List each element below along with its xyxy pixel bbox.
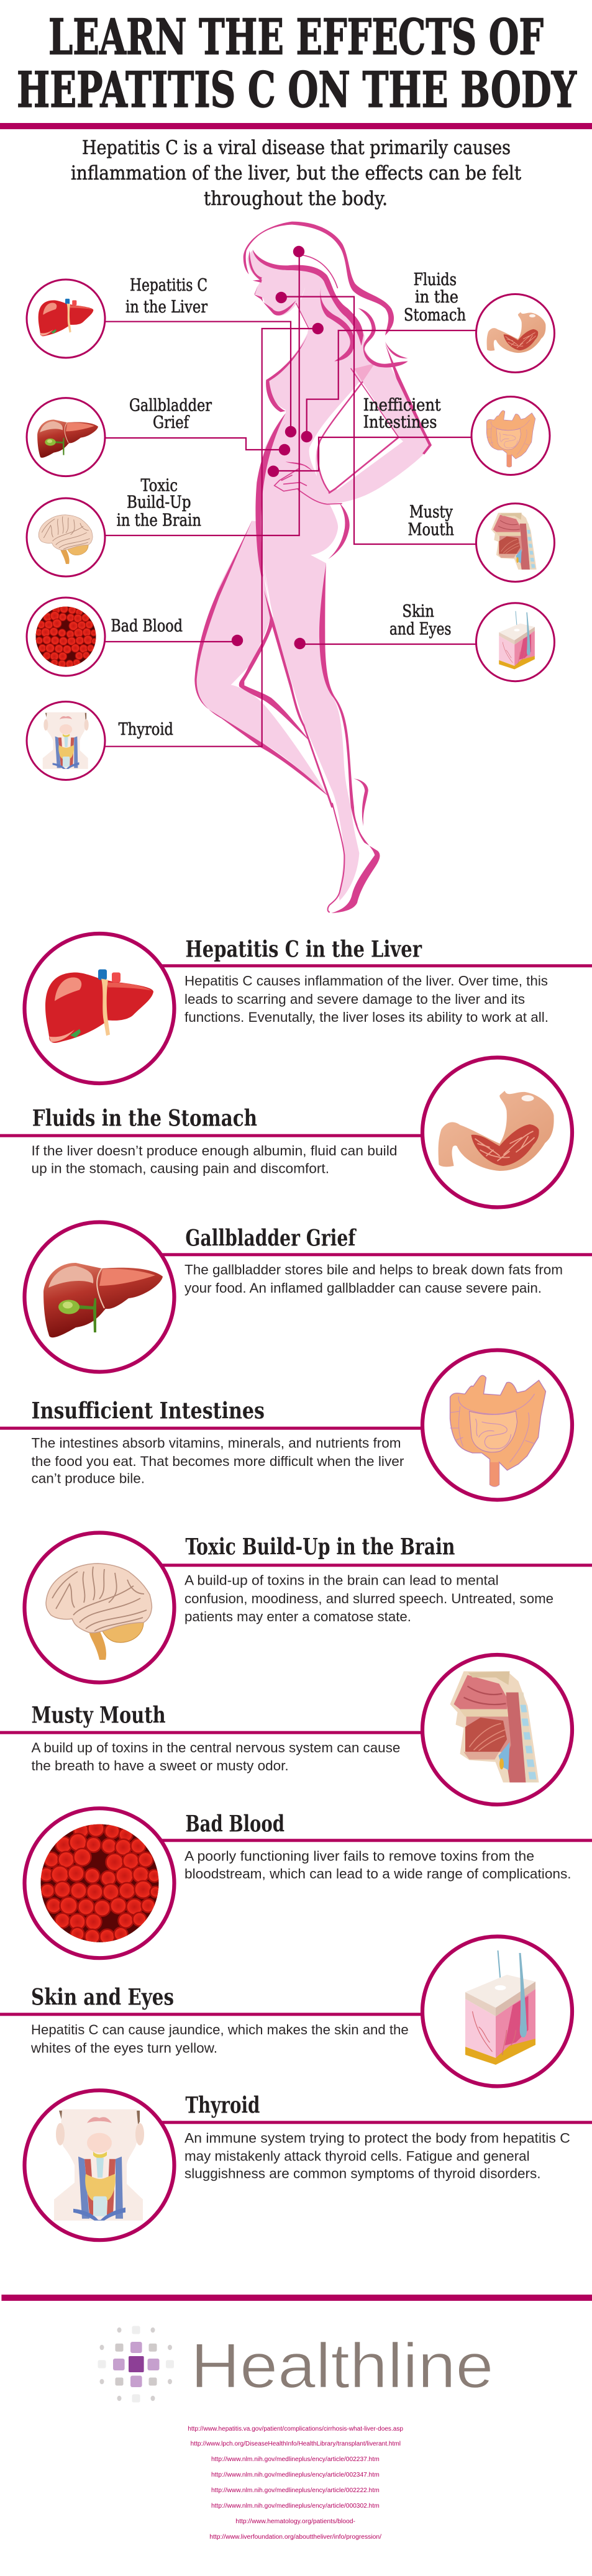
body text: whites of the eyes turn yellow. <box>30 2040 217 2055</box>
body text: If the liver doesn’t produce enough albumin, fluid can build <box>31 1143 398 1158</box>
body text: functions. Evenutally, the liver loses its ability to work at all. <box>184 1009 549 1025</box>
body text <box>184 2130 570 2182</box>
references: http://www.lpch.org/DiseaseHealthInfo/HealthLibrary/transplant/liverant.html <box>191 2441 401 2447</box>
section: Fluids in the Stomach <box>0 1057 572 1208</box>
body text: your food. An inflamed gallbladder can cause severe pain. <box>184 1280 542 1296</box>
heading: Hepatitis C in the Liver <box>185 937 422 963</box>
icon: gallbladder small <box>27 398 105 476</box>
diagram labels: Gallbladder <box>129 396 212 416</box>
body text <box>31 1740 400 1773</box>
icon: thyroid small <box>27 702 105 780</box>
references: http://www.hepatitis.va.gov/patient/complications/cirrhosis-what-liver-does.asp <box>188 2426 403 2433</box>
body text: patients may enter a comatose state. <box>184 1609 411 1624</box>
diagram labels: Skin <box>402 602 434 621</box>
body text: the food you eat. That becomes more difficult when the liver <box>31 1454 404 1469</box>
section: Gallbladder Grief <box>25 1222 592 1372</box>
body text <box>184 1262 563 1296</box>
Healthline logo <box>98 2326 493 2403</box>
header rule <box>0 123 592 129</box>
diagram labels: Mouth <box>408 521 454 540</box>
body text: A build up of toxins in the central nervous system can cause <box>31 1740 400 1755</box>
references: http://www.nlm.nih.gov/medlineplus/ency/article/000302.htm <box>211 2503 380 2510</box>
diagram labels <box>111 270 466 739</box>
references <box>188 2426 403 2541</box>
body text: Hepatitis C causes inflammation of the liver. Over time, this <box>184 973 548 989</box>
body text: may mistakenly attack thyroid cells. Fatigue and general <box>184 2148 530 2164</box>
body text <box>31 1143 398 1176</box>
body text <box>30 2022 409 2055</box>
intro text: Hepatitis C is a viral disease that primarily causes <box>82 137 511 159</box>
diagram labels: Inefficient <box>363 396 441 415</box>
diagram labels: Fluids <box>414 270 457 289</box>
references: http://www.liverfoundation.org/abouttheliver/info/progression/ <box>209 2534 381 2541</box>
section: Bad Blood <box>25 1808 592 1958</box>
section: Hepatitis C in the Liver <box>25 934 592 1083</box>
body text: The gallbladder stores bile and helps to break down fats from <box>184 1262 563 1278</box>
body text: up in the stomach, causing pain and discomfort. <box>31 1160 329 1176</box>
diagram labels: Thyroid <box>119 720 173 739</box>
section: Insufficient Intestines <box>0 1350 572 1500</box>
icon: intestines small <box>471 396 550 475</box>
logo mark <box>98 2326 174 2403</box>
body text: leads to scarring and severe damage to the liver and its <box>184 991 525 1007</box>
heading: Musty Mouth <box>31 1702 166 1728</box>
intro text: throughout the body. <box>204 188 388 210</box>
diagram labels: Musty <box>409 503 453 522</box>
icon: mouth <box>422 1655 572 1805</box>
heading: Insufficient Intestines <box>31 1398 265 1424</box>
body text <box>184 1573 553 1624</box>
section: Musty Mouth <box>0 1655 572 1805</box>
icon: liver small <box>27 280 105 358</box>
diagram labels: Hepatitis C <box>130 276 207 295</box>
body text: can’t produce bile. <box>31 1471 145 1486</box>
section: Skin and Eyes <box>0 1937 572 2086</box>
heading: Skin and Eyes <box>31 1984 174 2010</box>
body text: A build-up of toxins in the brain can lead to mental <box>184 1573 499 1588</box>
diagram labels: in the <box>415 288 458 307</box>
diagram labels: and Eyes <box>389 620 451 639</box>
connector lines <box>105 252 476 747</box>
body text: A poorly functioning liver fails to remove toxins from the <box>184 1849 534 1864</box>
icon: mouth small <box>476 503 554 581</box>
intro text: inflammation of the liver, but the effects can be felt <box>71 162 521 184</box>
heading: Bad Blood <box>185 1811 285 1837</box>
icon: liver <box>25 934 174 1083</box>
heading: Thyroid <box>185 2093 260 2119</box>
diagram labels: Build-Up <box>127 493 191 512</box>
body text: Hepatitis C can cause jaundice, which makes the skin and the <box>31 2022 409 2037</box>
icon: blood <box>25 1808 174 1958</box>
references: http://www.nlm.nih.gov/medlineplus/ency/article/002222.htm <box>211 2487 380 2494</box>
icon: blood small <box>27 598 105 676</box>
diagram labels: Intestines <box>363 413 437 432</box>
icon: intestines <box>422 1350 572 1500</box>
body text: confusion, moodiness, and slurred speech. Untreated, some <box>184 1591 553 1606</box>
body text: bloodstream, which can lead to a wide range of complications. <box>184 1866 572 1882</box>
references: http://www.nlm.nih.gov/medlineplus/ency/article/002237.htm <box>211 2456 380 2463</box>
diagram labels: in the Liver <box>125 298 207 317</box>
body text: An immune system trying to protect the body from hepatitis C <box>184 2130 570 2146</box>
body figure <box>194 222 432 913</box>
icon: brain <box>25 1533 174 1682</box>
intro text <box>71 137 521 210</box>
references: http://www.hematology.org/patients/blood- <box>235 2518 355 2525</box>
diagram labels: in the Brain <box>117 511 201 530</box>
heading: Gallbladder Grief <box>185 1226 357 1252</box>
diagram labels: Toxic <box>140 476 178 496</box>
wordmark: Healthline <box>191 2331 493 2401</box>
diagram labels: Bad Blood <box>111 617 183 636</box>
body text: sluggishness are common symptoms of thyroid disorders. <box>184 2165 540 2182</box>
icon: stomach small <box>476 294 554 373</box>
icon: skin small <box>476 603 554 681</box>
diagram labels: Stomach <box>404 306 466 325</box>
section: Toxic Build-Up in the Brain <box>25 1533 592 1682</box>
heading: Toxic Build-Up in the Brain <box>185 1534 455 1560</box>
body text: The intestines absorb vitamins, minerals, and nutrients from <box>31 1436 401 1451</box>
body text <box>31 1436 404 1486</box>
section: Thyroid <box>25 2090 592 2240</box>
heading: Fluids in the Stomach <box>32 1105 257 1131</box>
footer rule <box>1 2295 592 2301</box>
title <box>17 8 577 119</box>
connector dots <box>232 246 324 649</box>
body text <box>184 1849 572 1882</box>
references: http://www.nlm.nih.gov/medlineplus/ency/article/002347.htm <box>211 2472 380 2478</box>
diagram labels: Grief <box>153 413 190 432</box>
icon: brain small <box>27 498 105 576</box>
body text: the breath to have a sweet or musty odor. <box>31 1758 289 1773</box>
icon: skin <box>422 1937 572 2086</box>
icon: stomach <box>422 1057 572 1208</box>
body text <box>184 973 549 1025</box>
icon: gallbladder <box>25 1222 174 1372</box>
icon: thyroid <box>25 2090 174 2240</box>
